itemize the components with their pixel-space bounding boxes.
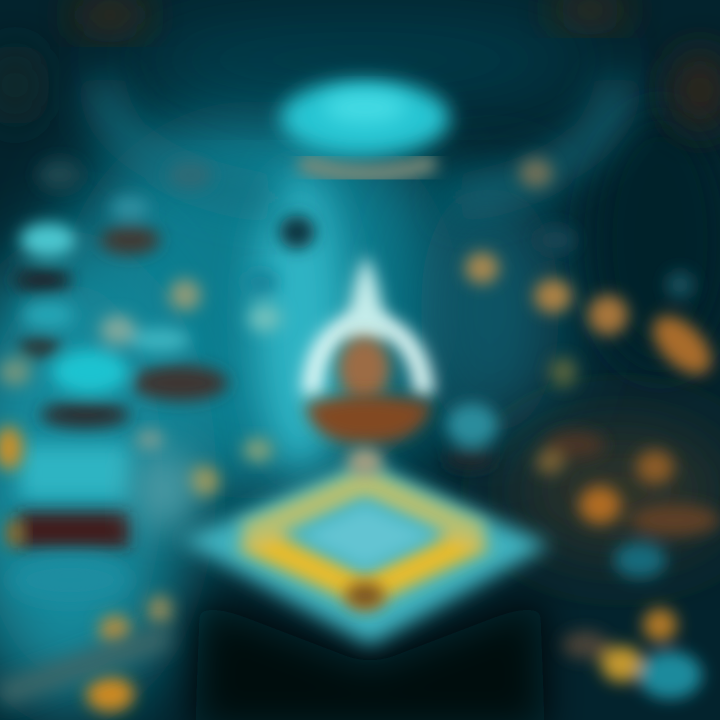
lower diamond platform <box>180 460 550 720</box>
glowing white arch <box>312 322 424 395</box>
left lower panels <box>0 426 273 712</box>
inner pool <box>300 505 435 568</box>
left floating blocks <box>0 160 315 429</box>
right floating amber blocks <box>445 158 720 699</box>
white spire <box>344 255 388 340</box>
yellow ring <box>245 482 482 592</box>
top halo arcs <box>100 80 620 200</box>
central figure <box>305 255 432 476</box>
brown base <box>305 395 432 443</box>
platform shadow <box>195 600 545 720</box>
top glowing bowl <box>280 80 450 174</box>
platform body <box>180 460 550 645</box>
brown body <box>338 336 390 400</box>
